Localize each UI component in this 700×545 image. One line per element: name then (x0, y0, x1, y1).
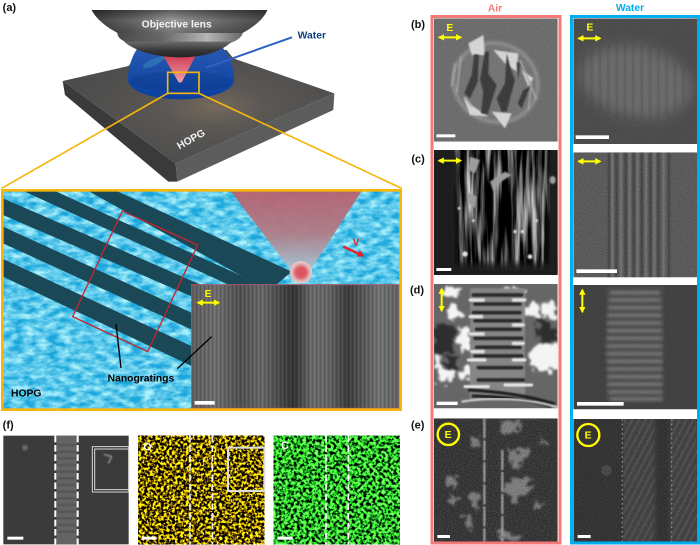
label HOPG: HOPG (11, 389, 41, 400)
panel (d) water (573, 285, 697, 409)
heading Air: Air (488, 4, 502, 15)
polarisation arrow (579, 290, 585, 312)
laser-written stripes (3, 191, 292, 370)
label (a): (a) (3, 2, 16, 14)
red scan box (73, 211, 198, 352)
label O: O (143, 441, 152, 453)
zoom box and guide lines (2, 72, 402, 188)
scale bar (437, 535, 450, 538)
label E: E (205, 289, 212, 300)
air column frame (432, 16, 560, 543)
scale bar (576, 269, 617, 273)
scale bar (436, 134, 455, 137)
column headings and row labels (410, 3, 644, 431)
label Nanogratings: Nanogratings (108, 373, 174, 384)
objective lens (92, 10, 267, 57)
polarisation circle E: E (585, 431, 592, 442)
panel (c) air (434, 150, 562, 275)
panel (a): objective lens setup (2, 2, 402, 188)
label (e): (e) (411, 419, 425, 431)
scale bar (577, 402, 624, 406)
label (c): (c) (411, 154, 425, 166)
panel (b) water (573, 18, 698, 144)
panel (a): magnified view (2, 190, 401, 410)
label (b): (b) (411, 19, 425, 31)
water texture background (3, 191, 400, 409)
pointer lines (116, 324, 212, 369)
water droplet (128, 43, 234, 99)
polarisation arrow (579, 35, 600, 41)
velocity arrow (343, 247, 362, 255)
water pointer line (206, 37, 292, 68)
polarisation arrow (579, 158, 600, 164)
orange frame (2, 190, 401, 410)
panel (e) water (573, 417, 697, 545)
scale bar (576, 135, 609, 139)
heading Water: Water (616, 3, 644, 14)
polarisation arrow (439, 34, 461, 40)
scale bar (195, 401, 215, 405)
laser beam (231, 191, 362, 268)
water column frame (572, 16, 698, 543)
panel (d) air (434, 284, 562, 408)
polarisation circle E: E (445, 430, 452, 441)
label C: C (281, 440, 289, 452)
panel (e) air (434, 418, 558, 542)
label V: V (353, 238, 360, 249)
scale bar (437, 402, 458, 405)
label (f): (f) (3, 420, 14, 432)
scale bar (578, 535, 591, 538)
SEM inset (192, 285, 399, 408)
panel (f): elemental maps (3, 420, 400, 544)
laser cone (163, 55, 196, 82)
label Water: Water (298, 30, 326, 41)
oxygen map (138, 436, 264, 544)
panel (c) water (573, 152, 697, 277)
label Objective lens: Objective lens (142, 20, 212, 31)
label E: E (586, 23, 593, 34)
label E: E (446, 23, 453, 34)
focal spot (290, 261, 312, 284)
HOPG slab (63, 50, 334, 182)
label HOPG: HOPG (175, 128, 207, 152)
carbon map (274, 436, 400, 544)
polarisation arrow (439, 158, 461, 164)
label (d): (d) (410, 285, 424, 297)
polarisation arrow (198, 300, 219, 306)
scale bar (436, 268, 451, 271)
panel (b) air (434, 18, 558, 142)
SEM image (3, 436, 129, 544)
polarisation arrow (439, 289, 445, 311)
